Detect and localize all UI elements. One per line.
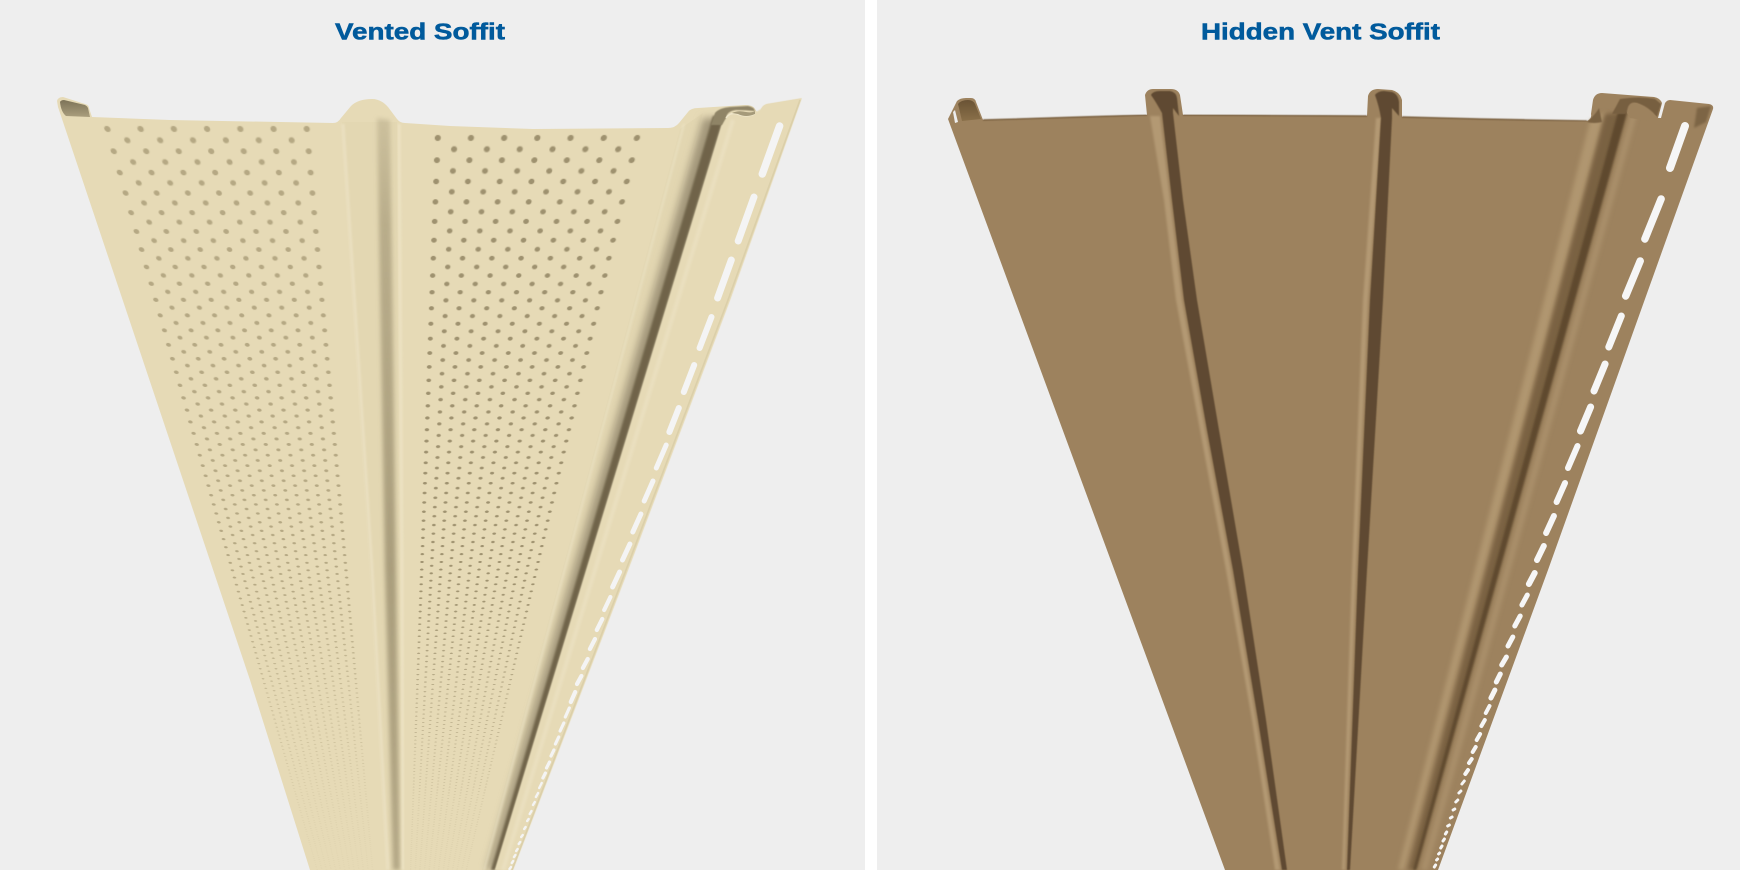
hidden panel body	[948, 89, 1713, 870]
panel: left background	[0, 0, 865, 870]
vented flange	[495, 98, 802, 870]
panel: right background	[877, 0, 1740, 870]
hidden slots	[1434, 126, 1685, 867]
hidden groove B	[1342, 91, 1399, 870]
vented top hook fold	[711, 106, 755, 125]
vented slots	[510, 126, 780, 869]
hidden flange rail	[1694, 106, 1711, 128]
hidden top fold	[1612, 98, 1661, 121]
vented center ridge	[342, 118, 403, 870]
vented perforations: right field	[409, 132, 644, 870]
heading: Vented Soffit: Vented Soffit	[335, 18, 505, 44]
hidden groove A	[1150, 91, 1287, 870]
hidden groove C	[1398, 108, 1634, 870]
soffit: vented	[57, 97, 802, 870]
heading: Hidden Vent Soffit: Hidden Vent Soffit	[1201, 18, 1440, 44]
vented right groove	[482, 113, 724, 870]
vented perforations: left field	[100, 124, 374, 870]
hidden top edge	[983, 115, 1587, 121]
hidden left hook	[953, 100, 981, 123]
vented left hook channel	[60, 100, 90, 117]
soffit: hidden vent	[948, 89, 1713, 870]
vented panel body	[57, 97, 802, 870]
